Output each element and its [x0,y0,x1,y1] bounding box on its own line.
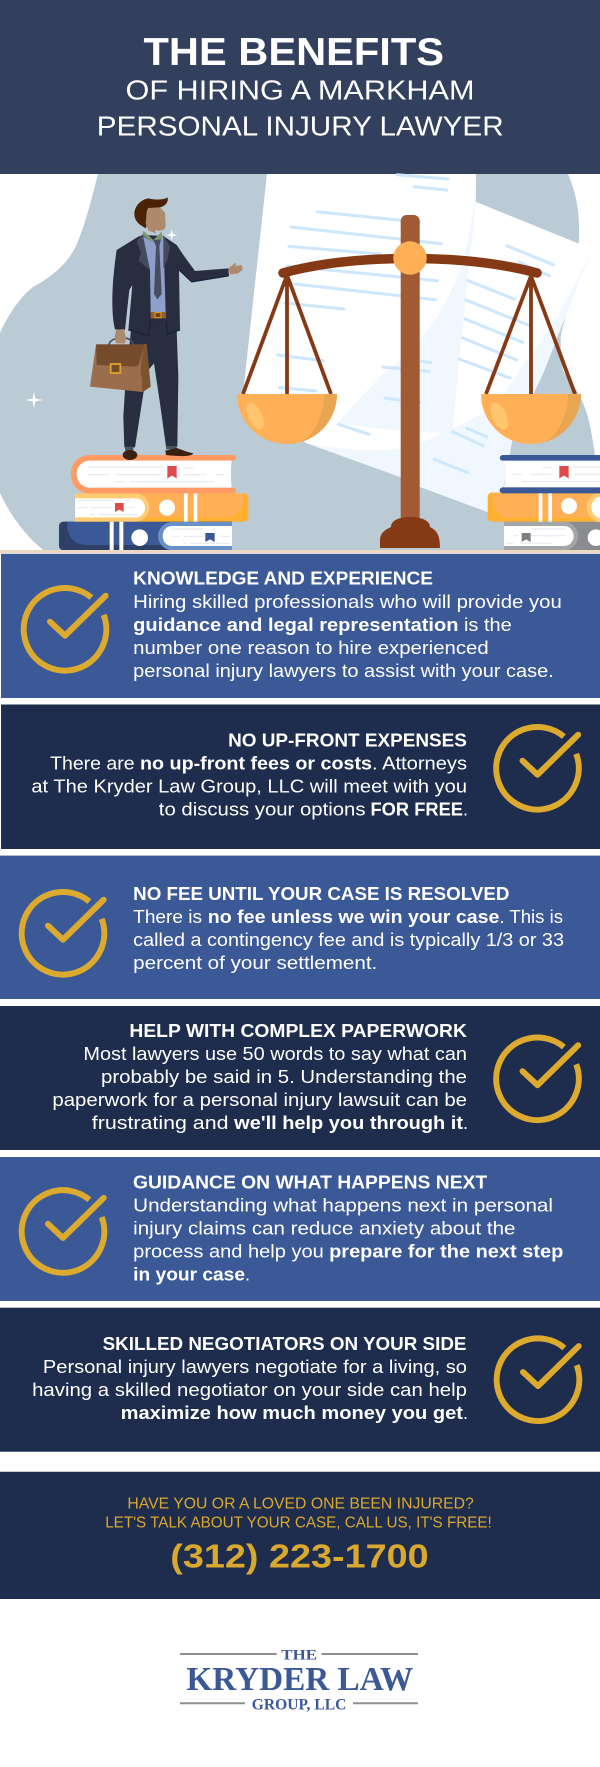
body text: in your case [133,1265,245,1285]
ground line [0,550,600,553]
panel: no up-front expenses [1,704,600,849]
left hand [115,329,126,343]
body text: prepare for the next step [329,1242,563,1262]
tie [153,239,162,299]
body text: . [245,1265,250,1285]
body text: . [463,1113,468,1133]
body text: . [463,1403,468,1423]
call to action text: HAVE YOU OR A LOVED ONE BEEN INJURED? [127,1495,474,1512]
jacket [112,235,229,336]
icon: check circle [10,1178,116,1285]
body text: There is [133,907,202,927]
navy book [500,455,600,493]
left pan [237,394,337,444]
icon: check circle [484,1026,591,1132]
hair [134,197,168,228]
base [380,517,440,548]
shirt [141,235,166,312]
body text: percent of your settlement. [133,953,377,973]
body text [32,1357,468,1423]
body text [133,1196,563,1285]
subtitle line 1: OF HIRING A MARKHAM [126,74,474,105]
middle book [75,493,248,522]
call to action text [105,1495,492,1531]
heading: NO UP-FRONT EXPENSES [228,731,467,751]
body text: called a contingency fee and is typically 1/3 or 33 [133,930,564,950]
body text: we'll help you through it [233,1113,463,1133]
logo: KRYDER LAW [186,1661,413,1698]
heading: HELP WITH COMPLEX PAPERWORK [129,1021,467,1041]
body text [52,1044,468,1133]
body text: probably be said in 5. Understanding the [101,1067,467,1087]
heading: NO FEE UNTIL YOUR CASE IS RESOLVED [133,884,509,904]
lapels [137,234,170,270]
body text [31,754,468,820]
panel: knowledge and experience [1,554,600,698]
right book stack [488,455,600,550]
phone number: (312) 223-1700 [170,1538,429,1575]
heading: KNOWLEDGE AND EXPERIENCE [133,569,433,589]
beam [283,258,537,273]
body text: having a skilled negotiator on your side can help [32,1380,467,1400]
body text: personal injury lawyers to assist with your case. [133,661,554,681]
rods [243,275,575,394]
briefcase [90,338,151,392]
collar [142,231,162,242]
panel: help with complex paperwork [0,1006,600,1150]
left book stack [59,455,248,550]
orange book [488,492,600,522]
gray book [504,522,600,550]
body text: FOR FREE [370,800,463,820]
sparkles [25,229,178,409]
icon: check circle [12,576,118,682]
icon: check circle [10,880,116,986]
body text: frustrating and [92,1113,228,1133]
body text: . This is [499,907,563,927]
body text [133,907,564,973]
panel: skilled negotiators on your side [0,1308,600,1452]
body text: number one reason to hire experienced [133,638,489,658]
pillar [401,215,420,520]
icon: check circle [484,715,591,821]
shoes [123,448,193,460]
body text: injury claims can reduce anxiety about the [133,1219,515,1239]
body text: Most lawyers use 50 words to say what can [83,1044,467,1064]
heading: SKILLED NEGOTIATORS ON YOUR SIDE [103,1334,466,1354]
heading: GUIDANCE ON WHAT HAPPENS NEXT [133,1173,487,1193]
background blob [0,174,600,550]
body text: guidance and legal representation [133,615,458,635]
body text: no up-front fees or costs [140,754,372,774]
body text: at The Kryder Law Group, LLC will meet with you [31,777,467,797]
logo: THE [281,1647,317,1663]
paper right white [453,202,592,428]
bottom book [59,522,232,550]
body text: Hiring skilled professionals who will provide you [133,592,562,612]
body text: no fee unless we win your case [208,907,499,927]
subtitle line 2: PERSONAL INJURY LAWYER [97,111,504,142]
call to action text: LET'S TALK ABOUT YOUR CASE, CALL US, IT'S FREE! [105,1514,492,1531]
paper back [243,174,592,513]
call to action panel [0,1471,600,1599]
body text: maximize how much money you get [121,1403,463,1423]
body text: is the [464,615,512,635]
header banner [0,0,600,174]
top book [71,455,236,493]
panel: guidance on what happens next [0,1157,600,1301]
body text [133,592,562,681]
title: THE BENEFITS [144,31,444,74]
illustration: lawyer with scales of justice [0,174,600,553]
body text: process and help you [133,1242,324,1262]
body text: paperwork for a personal injury lawsuit can be [52,1090,467,1110]
logo: GROUP, LLC [252,1696,346,1713]
icon: check circle [485,1327,591,1433]
belt [151,312,166,318]
body text: Personal injury lawyers negotiate for a living, so [43,1357,467,1377]
right hand [228,262,243,275]
panel: no fee until your case is resolved [0,856,600,999]
paper text lines [278,175,553,473]
right pan [481,394,581,444]
logo [180,1647,418,1713]
body text: There are [50,754,135,774]
scale of justice [237,215,581,548]
lawyer figure [90,197,243,460]
body text: . Attorneys [372,754,467,774]
ankles [125,446,177,451]
body text: Understanding what happens next in personal [133,1196,553,1216]
body text: to discuss your options [159,800,366,820]
face [146,207,166,233]
trousers [123,318,178,447]
pivot [393,241,427,275]
body text: . [463,800,468,820]
paper main white [243,174,476,450]
jacket shadow lines [128,270,228,336]
